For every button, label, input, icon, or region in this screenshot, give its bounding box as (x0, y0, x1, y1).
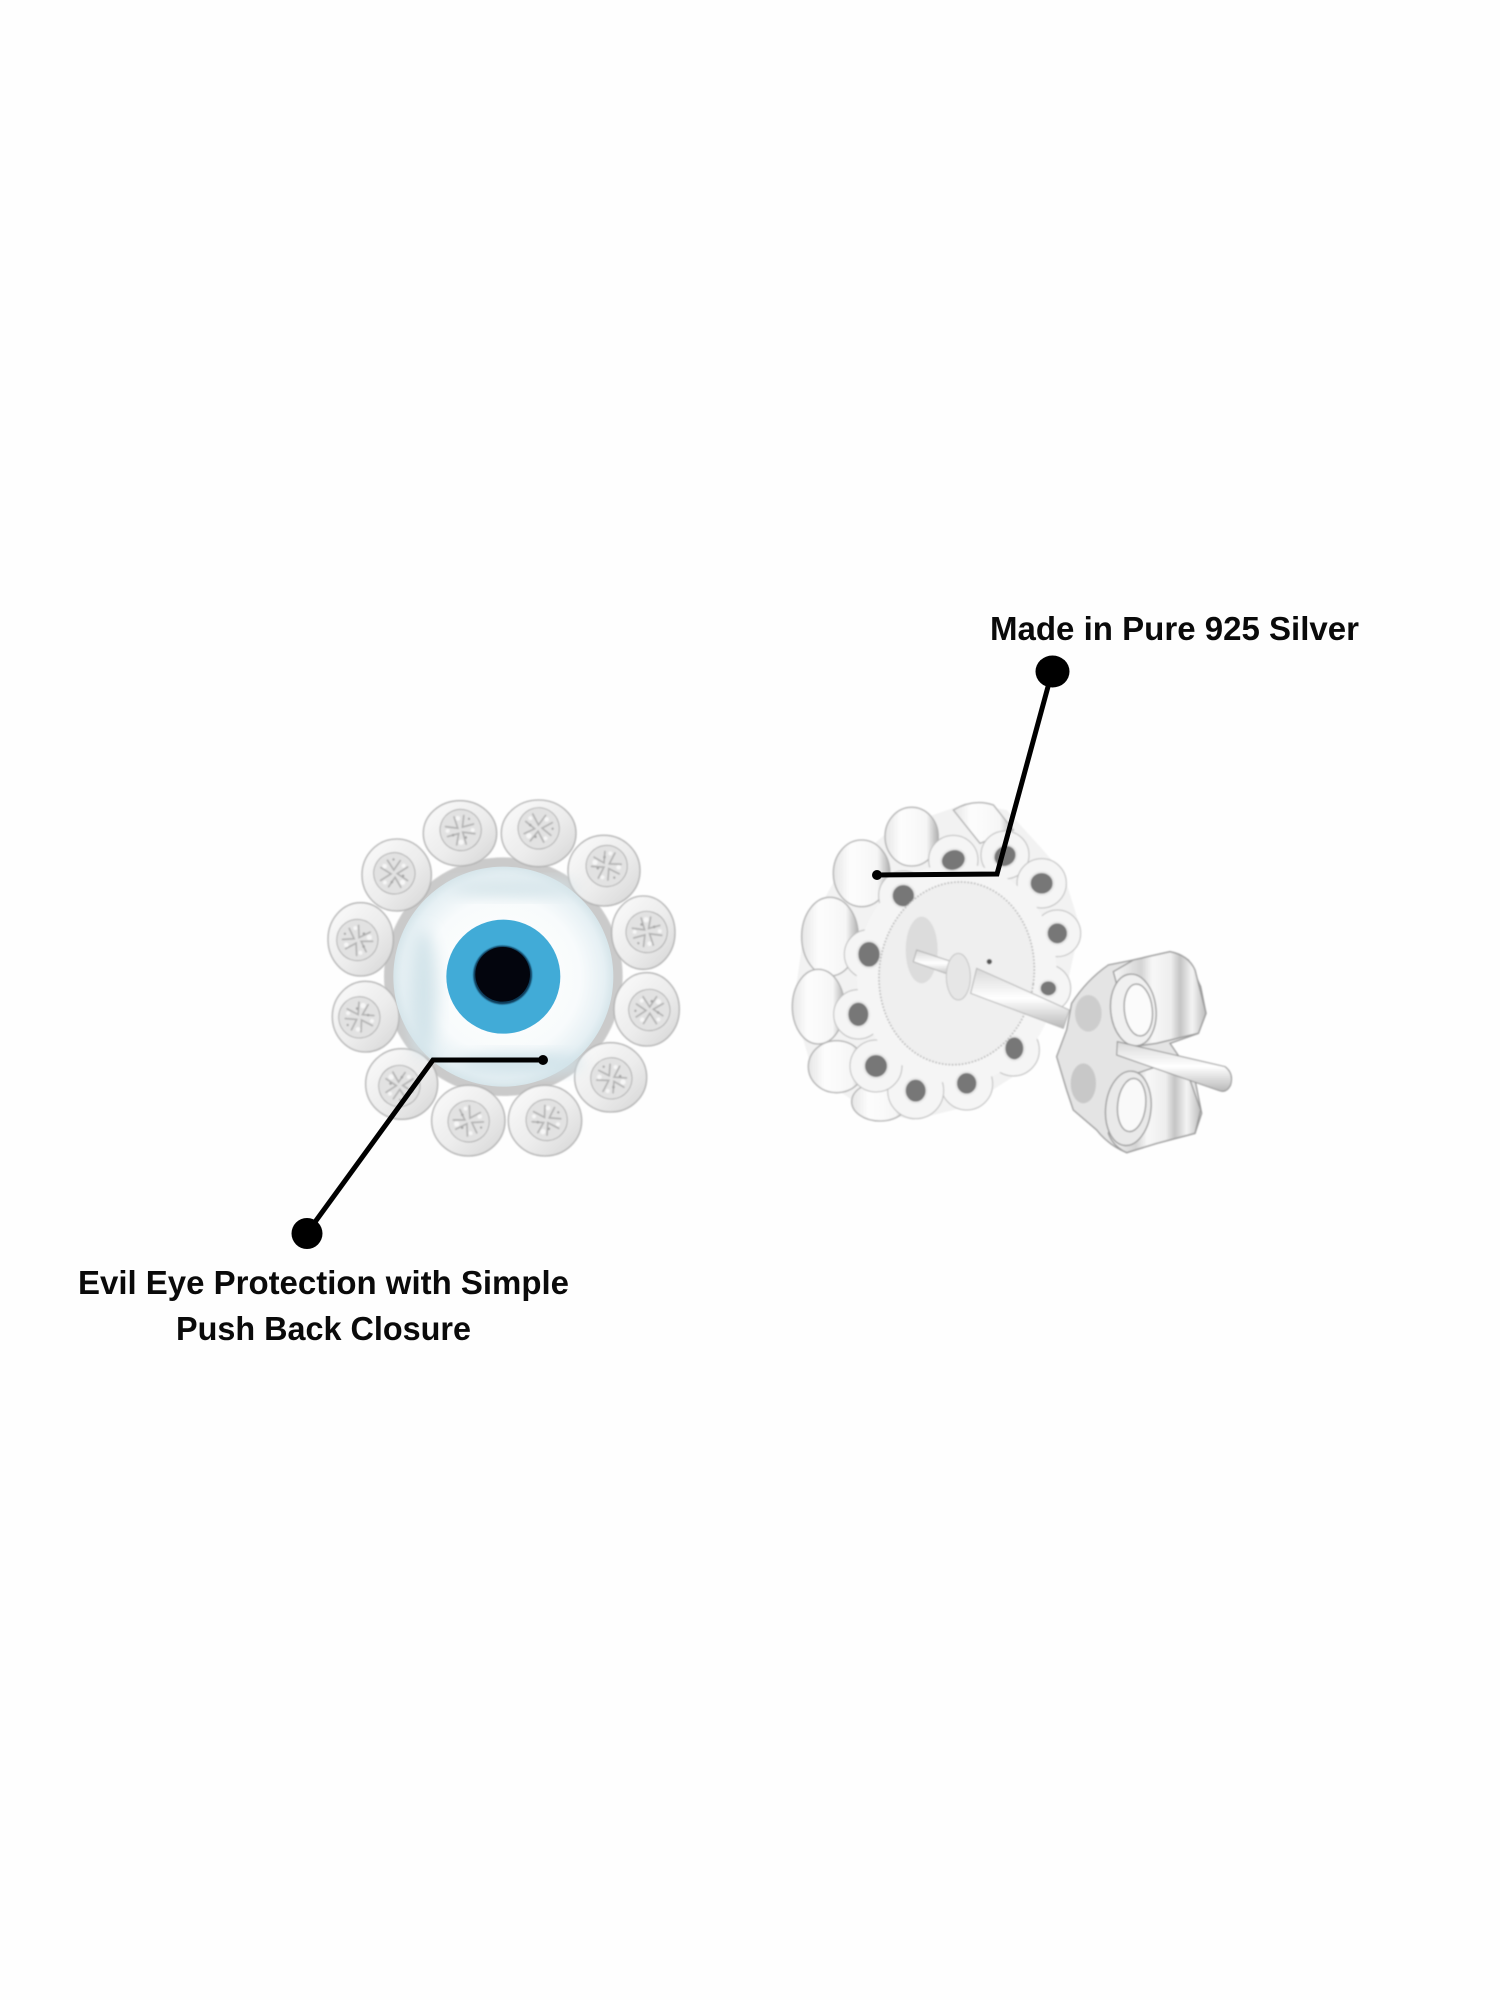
callout text: Evil Eye Protection with Simple (78, 1264, 569, 1301)
central disc (867, 872, 1046, 1075)
callout text: Push Back Closure (176, 1310, 471, 1347)
ring of twelve bezel set stones (328, 800, 679, 1156)
back earring with post and butterfly clutch (792, 803, 1232, 1153)
upper barrel (1113, 952, 1206, 1047)
clutch wing (1057, 952, 1206, 1153)
small anchor dot (538, 1055, 548, 1065)
stone holes (847, 840, 1068, 1103)
earring post (913, 950, 957, 977)
lower barrel (1108, 1067, 1201, 1153)
small anchor dot (872, 870, 882, 880)
callout text: Made in Pure 925 Silver (990, 610, 1359, 647)
callout text (78, 1264, 569, 1347)
turquoise iris (446, 920, 560, 1034)
post tip (1117, 1042, 1232, 1091)
leader line (877, 672, 1052, 875)
large callout dot (292, 1218, 322, 1249)
large callout dot (1036, 656, 1070, 688)
silver base plate (384, 857, 623, 1096)
leader line (307, 1060, 543, 1233)
back plate scalloped lobes (834, 831, 1081, 1119)
callout: pure 925 silver (872, 610, 1359, 880)
body silhouette behind the lobes (793, 803, 1080, 1120)
mother of pearl eye (393, 867, 613, 1087)
black pupil (473, 946, 532, 1004)
side wall lobes (792, 803, 1013, 1121)
callout: evil eye protection (78, 1055, 569, 1347)
butterfly clutch (1057, 952, 1206, 1153)
front earring with evil eye (328, 800, 679, 1156)
